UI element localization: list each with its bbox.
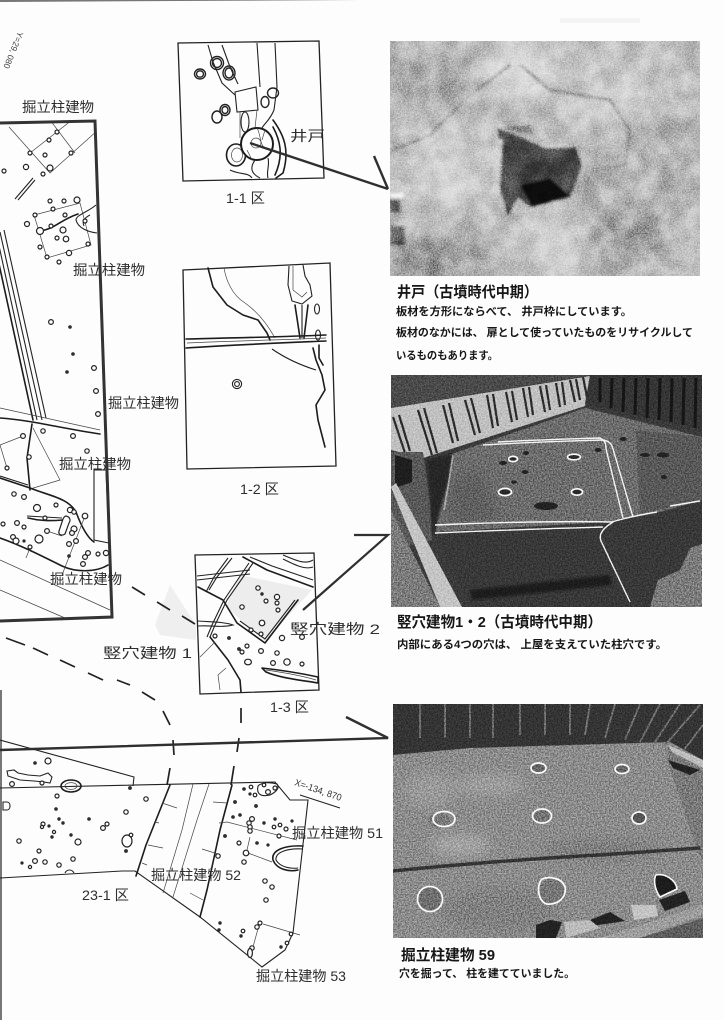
map frame bbox=[0, 121, 112, 621]
bottom-right rubble bbox=[659, 891, 690, 911]
photo: well bbox=[390, 41, 700, 276]
left dark pit and gravel bbox=[391, 452, 432, 550]
post holes bbox=[507, 456, 517, 462]
rock pile bbox=[650, 544, 702, 607]
arrow: pit buildings bbox=[303, 535, 388, 610]
rotated grid label Y: Y=29, 080 bbox=[1, 30, 25, 70]
dark trench line bbox=[393, 848, 700, 871]
arrow: post building 59 bbox=[0, 717, 388, 750]
description: 内部にある4つの穴は、 上屋を支えていた柱穴です。 bbox=[397, 637, 667, 651]
inset map 1-1 bbox=[178, 41, 324, 181]
dashed road outlines bbox=[6, 587, 241, 785]
scan edge shadows bbox=[0, 0, 360, 1020]
gray pit-building highlight bbox=[155, 585, 196, 640]
arrow: well bbox=[250, 143, 388, 189]
label: post building 51: 掘立柱建物 51 bbox=[292, 825, 383, 841]
right strip bbox=[667, 745, 703, 860]
label: post building 2: 掘立柱建物 bbox=[73, 262, 145, 278]
grid label X: X=-134, 870 bbox=[293, 777, 343, 804]
label: district 1-2: 1-2 区 bbox=[240, 481, 279, 497]
heading: 掘立柱建物 59 bbox=[401, 946, 495, 964]
label: district 1-3: 1-3 区 bbox=[270, 699, 309, 715]
label: district 23-1: 23-1 区 bbox=[82, 887, 129, 903]
site map: upper district bbox=[0, 120, 196, 640]
heading: 井戸（古墳時代中期） bbox=[397, 283, 538, 301]
label: post building 52: 掘立柱建物 52 bbox=[151, 867, 241, 883]
label: well: 井戸 bbox=[290, 128, 325, 144]
excavated floor bbox=[436, 408, 702, 532]
label: post building 5: 掘立柱建物 bbox=[50, 571, 122, 587]
sheet-pile wall bbox=[391, 376, 590, 458]
label: post building top: 掘立柱建物 bbox=[22, 99, 94, 115]
post holes bbox=[428, 812, 450, 828]
inset map 1-2 bbox=[183, 263, 336, 469]
label: district 1-1: 1-1 区 bbox=[226, 190, 265, 206]
plank wall bbox=[393, 704, 703, 760]
photo: pit buildings bbox=[391, 375, 702, 607]
heading: 竪穴建物1・2（古墳時代中期） bbox=[397, 613, 602, 631]
label: post building 53: 掘立柱建物 53 bbox=[256, 968, 346, 984]
white string outlines bbox=[435, 438, 700, 602]
label: post building 4: 掘立柱建物 bbox=[59, 456, 131, 472]
description: 穴を掘って、 柱を建てていました。 bbox=[399, 966, 575, 980]
inset map 1-3 bbox=[195, 553, 319, 694]
line 3: いるものもあります。 bbox=[396, 349, 498, 362]
label: post building 3: 掘立柱建物 bbox=[108, 395, 179, 411]
photo: post building 59 bbox=[393, 704, 703, 938]
line 2: 板材のなかには、 扉として使っていたものをリサイクルして bbox=[396, 325, 693, 339]
label: pit building 2: 竪穴建物 2 bbox=[290, 621, 380, 637]
label: pit building 1: 竪穴建物 1 bbox=[103, 645, 192, 661]
map contents bbox=[0, 120, 110, 618]
line 1: 板材を方形にならべて、 井戸枠にしています。 bbox=[396, 304, 632, 318]
caption: post building 59 bbox=[399, 946, 575, 980]
show-through header bbox=[560, 18, 640, 23]
site map: lower district bbox=[0, 740, 340, 967]
caption: well bbox=[396, 283, 693, 362]
caption: pit buildings bbox=[397, 613, 667, 651]
